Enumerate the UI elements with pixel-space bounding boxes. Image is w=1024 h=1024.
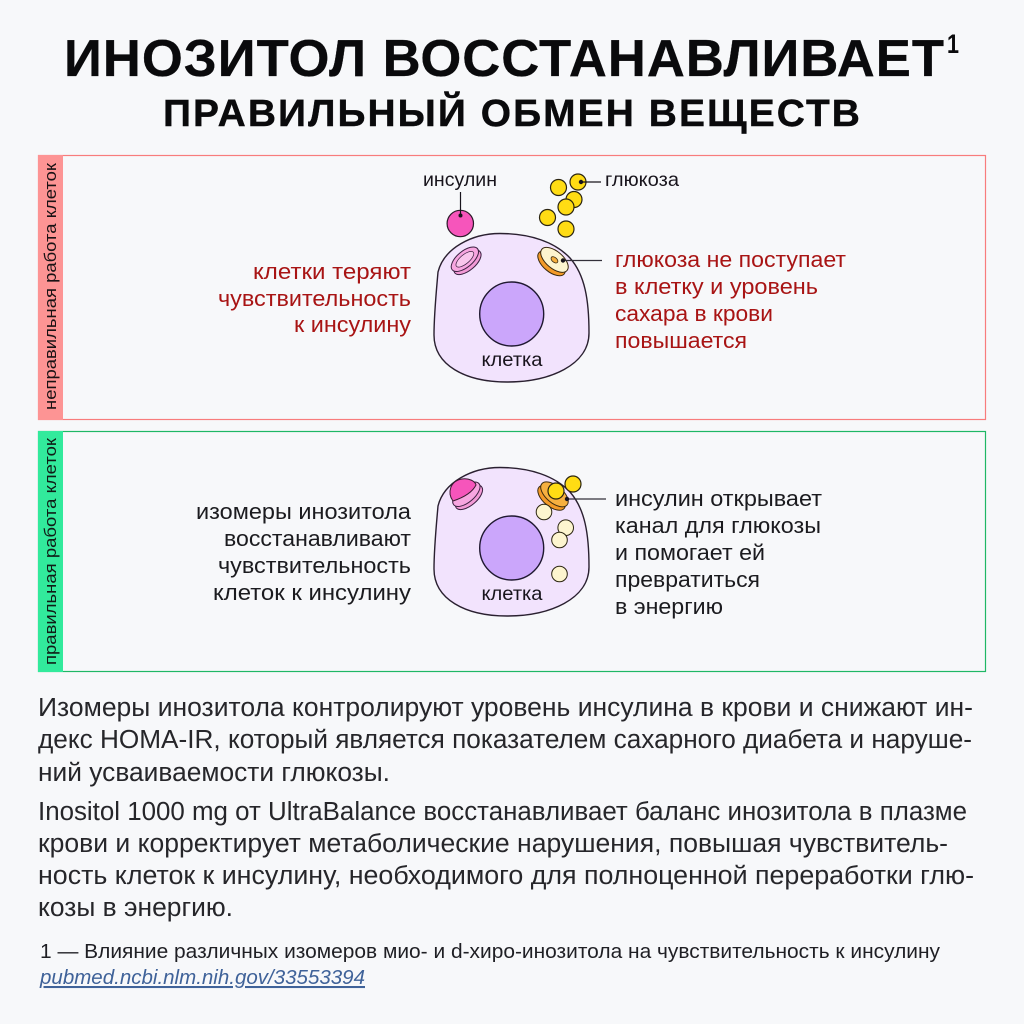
text: isomers restore sensitivity: чувствительность [218, 553, 411, 578]
text: cells lose sensitivity: чувствительность [218, 286, 411, 311]
body text: paragraph 1: ний усваиваемости глюкозы. [38, 759, 390, 787]
label: cell: клетка [482, 349, 543, 371]
title: 1 [947, 29, 959, 59]
text: isomers restore sensitivity [196, 499, 412, 605]
nucleus [480, 516, 544, 580]
insulin receptor with insulin [449, 477, 487, 514]
text: insulin opens channel: канал для глюкозы [615, 513, 821, 538]
label: glucose: глюкоза [605, 169, 679, 191]
label: insulin [423, 169, 497, 218]
text: insulin opens channel: в энергию [615, 594, 723, 619]
diagram: cell with closed receptors [423, 169, 679, 382]
text: glucose does not enter: глюкоза не поступает [615, 247, 846, 272]
title [64, 29, 959, 135]
side label: normal: правильная работа клеток [41, 437, 60, 665]
text: glucose does not enter: повышается [615, 328, 747, 353]
title: ИНОЗИТОЛ ВОССТАНАВЛИВАЕТ [64, 30, 945, 88]
side label: abnormal: неправильная работа клеток [41, 162, 60, 410]
footnote [39, 940, 941, 989]
panel: normal cell function [38, 431, 986, 672]
body text: paragraph 2: крови и корректирует метаболические нарушения, повышая чувствитель- [38, 830, 948, 858]
text: cells lose sensitivity: к инсулину [294, 312, 412, 337]
title: ПРАВИЛЬНЫЙ ОБМЕН ВЕЩЕСТВ [163, 90, 862, 135]
text: glucose does not enter: в клетку и уровень [615, 274, 818, 299]
text: cells lose sensitivity: клетки теряют [253, 259, 411, 284]
body text: paragraph 2: ность клеток к инсулину, необходимого для полноценной переработки глю- [38, 862, 974, 890]
text: insulin opens channel: и помогает ей [615, 540, 765, 565]
diagram: cell with open receptors [434, 468, 606, 616]
text: isomers restore sensitivity: изомеры инозитола [196, 499, 412, 524]
text: insulin opens channel: инсулин открывает [615, 486, 822, 511]
source link: pubmed.ncbi.nlm.nih.gov/33553394 [39, 966, 365, 989]
body text: paragraph 1: Изомеры инозитола контролируют уровень инсулина в крови и снижают ин- [38, 694, 973, 722]
nucleus [480, 282, 544, 346]
text: isomers restore sensitivity: восстанавливают [224, 526, 411, 551]
glucose molecules [540, 174, 586, 237]
body text: paragraph 2: Inositol 1000 mg от UltraBalance восстанавливает баланс инозитола в плазме [38, 798, 967, 826]
text: glucose does not enter: сахара в крови [615, 301, 773, 326]
text: cells lose sensitivity [218, 259, 412, 337]
insulin molecule [447, 210, 473, 237]
text: insulin opens channel [615, 486, 822, 619]
glucose channel [533, 243, 573, 280]
footnote: 1 — Влияние различных изомеров мио- и d-хиро-инозитола на чувствительность к инсулину [40, 940, 941, 963]
body text: paragraph 1: декс HOMA-IR, который является показателем сахарного диабета и наруше- [38, 726, 972, 754]
pointer: channel [561, 258, 602, 263]
label: insulin: инсулин [423, 169, 497, 191]
body text: paragraph 1 [38, 694, 973, 787]
insulin receptor [447, 242, 485, 279]
text: insulin opens channel: превратиться [615, 567, 760, 592]
pointer: channel [565, 497, 606, 501]
label: cell: клетка [482, 583, 543, 605]
glucose channel with glucose [533, 476, 581, 515]
body text: paragraph 2 [38, 798, 974, 922]
cell body [434, 234, 589, 382]
energy granules [536, 504, 574, 582]
text: glucose does not enter [615, 247, 846, 353]
body text: paragraph 2: козы в энергию. [38, 894, 233, 922]
text: isomers restore sensitivity: клеток к инсулину [213, 580, 412, 605]
panel: abnormal cell function [38, 155, 986, 420]
cell body [434, 468, 589, 616]
